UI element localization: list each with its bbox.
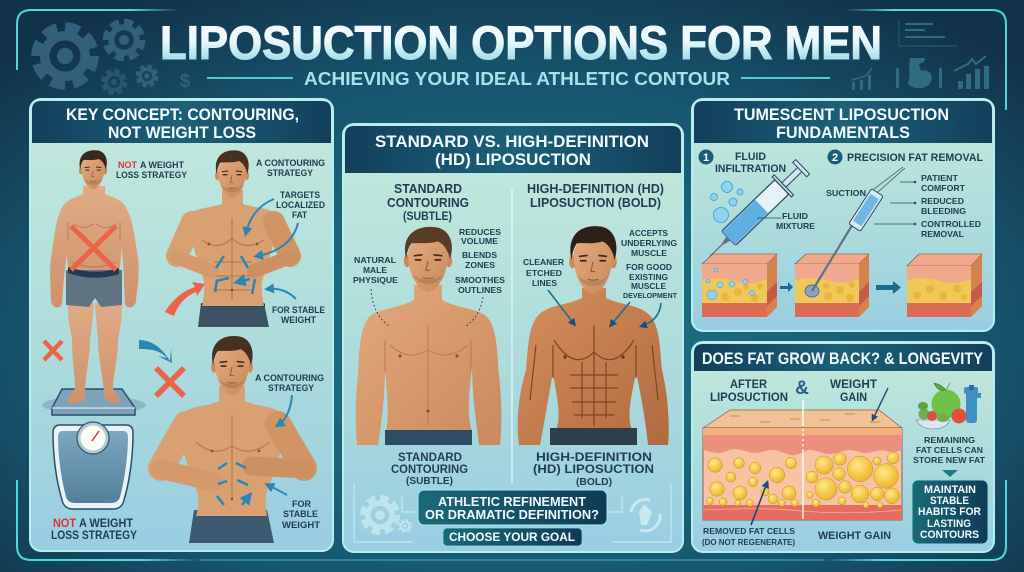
labels: hd right callouts: UNDERLYING	[621, 238, 677, 248]
icon: bubbles	[710, 182, 743, 222]
label: targets localized fat: FAT	[292, 210, 307, 221]
labels: after liposuction and weight gain: AFTER	[730, 377, 767, 391]
subheading: hd liposuction	[527, 181, 664, 210]
figure: hd physique	[518, 226, 669, 445]
label: standard contouring bottom: CONTOURING	[391, 464, 468, 476]
labels: hd right callouts: FOR GOOD	[626, 262, 672, 272]
arrow: weight gain	[873, 388, 888, 419]
label: fluid mixture: MIXTURE	[776, 221, 815, 231]
labels: hd right callouts: MUSCLE	[631, 248, 667, 258]
labels: hd left callouts: LINES	[532, 278, 557, 288]
callout: choose your goal: CHOOSE YOUR GOAL	[449, 530, 575, 544]
labels: hd left callouts: CLEANER	[523, 257, 564, 267]
label: not a weight loss strategy top: NOT	[118, 160, 137, 171]
heading: key concept: NOT WEIGHT LOSS	[108, 123, 256, 142]
panel: fat regrowth	[692, 342, 994, 552]
decorative icons: right charts	[852, 20, 989, 90]
heading: tumescent: TUMESCENT LIPOSUCTION	[734, 105, 949, 124]
heading: standard vs hd: (HD) LIPOSUCTION	[435, 150, 591, 169]
arrows: hd callout arrows	[548, 290, 661, 326]
heading: fat regrowth: DOES FAT GROW BACK? & LONGEVITY	[702, 349, 984, 368]
label: fluid mixture	[757, 211, 815, 231]
figure: contoured man bottom	[160, 336, 305, 543]
callout: maintain stable habits	[912, 480, 988, 544]
label: a contouring strategy top: A CONTOURING	[256, 158, 325, 169]
labels: standard right callouts: REDUCES	[459, 227, 501, 237]
label: not a weight loss strategy bottom	[51, 516, 137, 542]
label: standard contouring bottom: STANDARD	[398, 452, 462, 464]
labels: hd right callouts: EXISTING	[629, 272, 668, 282]
icon: red cross on belly	[71, 226, 116, 270]
callouts: benefits: CONTROLLED	[921, 219, 981, 229]
callouts: benefits: PATIENT	[921, 173, 959, 183]
icon: circular body	[631, 499, 660, 531]
subheading: standard contouring: (SUBTLE)	[403, 209, 452, 223]
label: for stable weight top	[272, 305, 325, 326]
arrow: removed fat cells	[751, 483, 767, 525]
text: remaining fat cells: STORE NEW FAT	[913, 455, 986, 465]
label: a contouring strategy bottom	[255, 373, 324, 394]
label: hd liposuction bottom	[533, 450, 654, 488]
labels: hd right callouts: DEVELOPMENT	[623, 293, 678, 300]
callouts: benefits: REDUCED	[921, 196, 964, 206]
tissue block 1	[702, 254, 777, 317]
callouts: benefits: REMOVAL	[921, 229, 964, 239]
label: targets localized fat	[276, 190, 325, 221]
panel: tumescent	[692, 99, 994, 331]
heading: key concept	[32, 101, 331, 143]
heading: standard vs hd	[345, 126, 681, 173]
heading: tumescent	[694, 101, 992, 143]
subheading: standard contouring: STANDARD	[394, 181, 462, 196]
arrows: blue contour arrows top	[215, 199, 298, 299]
callout: maintain stable habits: HABITS FOR	[918, 506, 981, 518]
label: for stable weight bottom	[282, 499, 320, 531]
label: a contouring strategy bottom: A CONTOURING	[255, 373, 324, 384]
figure: contoured man top	[176, 150, 291, 327]
decorative icons: left gears: $	[180, 71, 191, 92]
label: hd liposuction bottom: HIGH-DEFINITION	[536, 450, 652, 464]
labels: hd left callouts	[523, 257, 564, 288]
step 2 label: 2	[832, 152, 838, 164]
title: LIPOSUCTION OPTIONS FOR MEN	[160, 16, 882, 69]
labels: after liposuction and weight gain: GAIN	[840, 390, 867, 404]
arrow: down triangle	[942, 470, 958, 477]
callouts: benefits: COMFORT	[921, 183, 966, 193]
heading: key concept: KEY CONCEPT: CONTOURING,	[66, 105, 299, 124]
icon: healthy food and bottle	[916, 383, 981, 429]
label: for stable weight bottom: WEIGHT	[282, 520, 320, 531]
icon: bathroom scale	[53, 422, 133, 509]
icon: cannula	[812, 167, 905, 291]
icon: small red cross	[44, 341, 62, 360]
labels: after liposuction and weight gain: &	[795, 378, 809, 399]
labels: standard right callouts: ZONES	[465, 260, 495, 270]
labels: hd right callouts: MUSCLE	[631, 281, 666, 291]
label: a contouring strategy top	[256, 158, 325, 179]
arrow: step arrow one	[780, 282, 793, 292]
label: for stable weight bottom: STABLE	[283, 509, 318, 520]
label: fluid mixture: FLUID	[782, 211, 808, 221]
divider: dashed split	[802, 400, 804, 527]
heading: standard vs hd: STANDARD VS. HIGH-DEFINITION	[375, 132, 649, 151]
label: not a weight loss strategy top	[116, 160, 188, 181]
labels: hd right callouts	[621, 228, 678, 300]
label: targets localized fat: TARGETS	[280, 190, 320, 201]
label: a contouring strategy bottom: STRATEGY	[268, 383, 315, 394]
callout: athletic refinement: ATHLETIC REFINEMENT	[438, 495, 586, 509]
callout: athletic refinement	[418, 490, 607, 525]
subheading: standard contouring	[387, 181, 469, 223]
subheading: hd liposuction: LIPOSUCTION (BOLD)	[530, 195, 661, 210]
label: not a weight loss strategy bottom: A WEIGHT	[79, 516, 134, 530]
label: for stable weight bottom: FOR	[292, 499, 311, 510]
label: weight gain: WEIGHT GAIN	[818, 530, 891, 542]
arrow: step arrow two	[876, 281, 901, 294]
label: hd liposuction bottom: (BOLD)	[576, 477, 612, 488]
label: not a weight loss strategy top: LOSS STRATEGY	[116, 170, 188, 181]
callouts: benefits	[874, 173, 981, 239]
step 1 label: FLUID	[735, 151, 766, 163]
label: not a weight loss strategy top: A WEIGHT	[140, 160, 184, 171]
label: a contouring strategy top: STRATEGY	[267, 168, 314, 179]
callout: maintain stable habits: STABLE	[930, 495, 969, 507]
labels: after liposuction and weight gain: WEIGHT	[830, 377, 878, 391]
step 1 label: INFILTRATION	[715, 163, 786, 175]
step 1 label	[698, 150, 786, 175]
arrow: red curved	[165, 282, 205, 316]
panel: standard vs hd	[343, 124, 683, 552]
label: for stable weight top: FOR STABLE	[272, 305, 325, 316]
labels: standard right callouts: VOLUME	[461, 236, 498, 246]
step 2 label: PRECISION FAT REMOVAL	[847, 152, 983, 164]
figure: overweight man on scale	[42, 150, 146, 415]
icon: large red cross	[156, 368, 184, 396]
callout: maintain stable habits: CONTOURS	[920, 529, 979, 541]
callout: maintain stable habits: MAINTAIN	[924, 484, 976, 496]
figure: standard physique	[356, 227, 501, 445]
divider	[511, 188, 513, 483]
heading: tumescent: FUNDAMENTALS	[776, 123, 910, 142]
labels: standard right callouts	[455, 227, 505, 326]
label: hd liposuction bottom: (HD) LIPOSUCTION	[533, 462, 654, 476]
labels: hd left callouts: ETCHED	[526, 268, 562, 278]
label: for stable weight top: WEIGHT	[281, 315, 316, 326]
label: standard contouring bottom	[391, 452, 468, 487]
arrow: blue curve	[139, 340, 172, 363]
step 2 label	[828, 150, 983, 164]
label: removed fat cells	[702, 526, 795, 547]
label: removed fat cells: (DO NOT REGENERATE)	[702, 538, 795, 547]
labels: hd right callouts: ACCEPTS	[629, 228, 668, 238]
tissue block 3	[907, 254, 982, 317]
subheading: standard contouring: CONTOURING	[387, 195, 469, 210]
labels: standard left callouts	[353, 255, 398, 326]
diagram: skin cross-section	[703, 410, 902, 520]
labels: standard right callouts: SMOOTHES	[455, 275, 505, 285]
panel: key concept	[30, 99, 333, 551]
icon: gears	[364, 499, 410, 532]
text: remaining fat cells: REMAINING	[924, 435, 975, 445]
decorative icons: left gears	[38, 23, 191, 92]
callout: athletic refinement: OR DRAMATIC DEFINITION?	[425, 508, 599, 522]
tissue block 2	[795, 254, 869, 317]
labels: standard right callouts: OUTLINES	[458, 285, 502, 295]
callouts: benefits: BLEEDING	[921, 206, 966, 216]
icon: syringe 1	[700, 157, 812, 266]
labels: standard left callouts: MALE	[363, 265, 387, 275]
text: remaining fat cells	[913, 435, 986, 465]
arrows: blue contour arrows bottom	[217, 395, 292, 505]
step 1 label: 1	[703, 152, 709, 164]
labels: standard right callouts: BLENDS	[462, 250, 497, 260]
subtitle: ACHIEVING YOUR IDEAL ATHLETIC CONTOUR	[304, 69, 730, 89]
labels: after liposuction and weight gain: LIPOSUCTION	[710, 390, 788, 404]
label: targets localized fat: LOCALIZED	[276, 200, 325, 211]
label: not a weight loss strategy bottom: LOSS STRATEGY	[51, 528, 137, 542]
label: not a weight loss strategy bottom: NOT	[53, 516, 77, 530]
connector brackets	[354, 484, 671, 542]
callout: maintain stable habits: LASTING	[927, 518, 971, 530]
subheading: hd liposuction: HIGH-DEFINITION (HD)	[527, 181, 664, 196]
label: standard contouring bottom: (SUBTLE)	[406, 476, 453, 487]
label: removed fat cells: REMOVED FAT CELLS	[703, 526, 795, 536]
labels: after liposuction and weight gain	[710, 377, 878, 404]
text: remaining fat cells: FAT CELLS CAN	[916, 445, 983, 455]
heading: fat regrowth	[694, 344, 992, 371]
labels: standard left callouts: PHYSIQUE	[353, 275, 398, 285]
labels: standard left callouts: NATURAL	[354, 255, 396, 265]
label: suction: SUCTION	[826, 188, 866, 198]
